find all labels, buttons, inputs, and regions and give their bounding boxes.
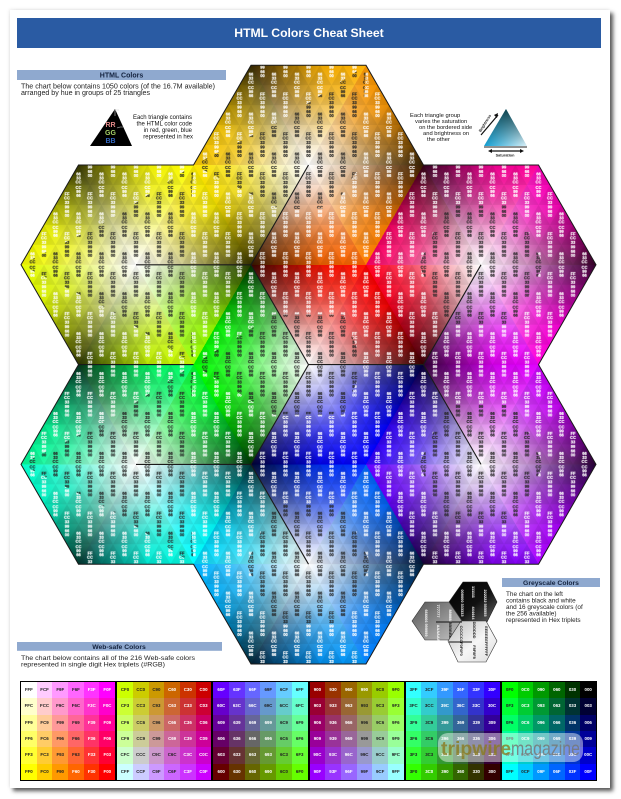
block: 6XX colors: 6F6 <box>296 736 303 741</box>
block: 9XX colors: 93C <box>329 752 337 757</box>
block: 6XX colors: 6F0 <box>296 769 303 774</box>
intro text: HTML Colors: arranged by hue in groups of 25 triangles <box>21 90 151 97</box>
text: greyscale description: represented in Hex triplets <box>506 617 581 624</box>
block: 0XX colors: 0C0 <box>521 687 529 692</box>
legend text: triangle group: and brightness on <box>423 131 469 137</box>
block: 9XX colors: 936 <box>329 720 337 725</box>
block: FXX colors: F6F <box>72 687 80 692</box>
block: 0XX colors: 0F3 <box>506 703 513 708</box>
block: 3XX colors: 33F <box>473 687 480 692</box>
block: FXX colors: F9C <box>56 703 64 708</box>
block: CXX colors: C06 <box>199 720 208 725</box>
block: 6XX colors: 66F <box>249 687 256 692</box>
block: 9XX colors: 906 <box>314 720 321 725</box>
block: FXX colors: F69 <box>72 720 80 725</box>
block: 9XX colors: 9C3 <box>376 703 384 708</box>
block: CXX colors: CF9 <box>121 736 129 741</box>
block: 6XX colors: 69C <box>264 703 272 708</box>
block: FXX colors: F03 <box>104 752 111 757</box>
block: CXX colors: C3F <box>184 769 192 774</box>
block: 3XX colors: 3F3 <box>410 752 417 757</box>
block: CXX colors: CC3 <box>136 703 145 708</box>
block: 6XX colors: 69F <box>264 687 272 692</box>
block: 6XX colors: 6C3 <box>280 752 288 757</box>
hexagon: black to dark grey <box>449 582 497 622</box>
hexagon: red to yellow hues <box>194 65 424 265</box>
block: 0XX colors: 09F <box>537 769 545 774</box>
legend text: triangle code: Each triangle contains <box>133 115 192 121</box>
hexagon chart outline and border lines <box>21 65 596 664</box>
block: 0XX colors: 00F <box>584 769 592 774</box>
block: 3XX colors: 369 <box>457 720 464 725</box>
chart: greyscale hexagons <box>412 582 497 662</box>
block: 0XX colors: 093 <box>537 703 545 708</box>
block: 9XX colors: 960 <box>345 687 352 692</box>
block: 9XX colors: 9F6 <box>392 720 400 725</box>
block: FXX colors: FFC <box>25 703 33 708</box>
block: 9XX colors: 99C <box>360 752 368 757</box>
hexagon: blue to magenta hues <box>366 365 596 564</box>
block: FXX colors: F36 <box>88 736 95 741</box>
block: 9XX colors: 93F <box>329 769 337 774</box>
hexagon: black to dark grey: 000000 <box>460 590 465 602</box>
block: CXX colors: C33 <box>184 703 192 708</box>
hexagon: light grey to white: DDDDDD <box>472 622 477 639</box>
block: 9XX colors: 9F9 <box>392 736 400 741</box>
block: 0XX colors: 066 <box>553 720 560 725</box>
text: greyscale description: and 16 greyscale colors (of <box>506 604 583 611</box>
legend text: triangle code <box>133 115 193 140</box>
block: FXX colors: FC3 <box>40 752 49 757</box>
block: 6XX colors: 636 <box>233 736 241 741</box>
block: 3XX colors: 3C0 <box>425 769 433 774</box>
block: 6XX colors: 60F <box>217 687 225 692</box>
block: 9XX colors: 996 <box>361 720 368 725</box>
hexagon: mid grey <box>412 602 462 642</box>
block: 6XX colors <box>212 681 309 781</box>
block: 6XX colors: 63C <box>233 703 241 708</box>
block: 6XX colors: 6F3 <box>296 752 303 757</box>
watermark: tripwire magazine <box>438 733 583 762</box>
block: 3XX colors: 3CC <box>425 703 434 708</box>
block: 3XX colors: 3C9 <box>425 720 433 725</box>
hexagon: magenta to red hues <box>366 165 596 365</box>
block: 9XX colors: 9F3 <box>392 703 400 708</box>
hexagon: light grey to white: F0F0F0 <box>459 642 464 656</box>
block: 9XX colors: 903 <box>314 703 321 708</box>
hexagon: black to dark grey: 111111 <box>471 586 476 599</box>
heading: Greyscale Colors: Greyscale Colors <box>523 580 579 587</box>
hexagon: mid grey: 777777 <box>436 605 441 617</box>
block: CXX colors: CFC <box>120 752 130 757</box>
block: 9XX colors: 96C <box>345 752 353 757</box>
block: FXX colors: F00 <box>104 769 111 774</box>
block: CXX colors: C69 <box>168 736 176 741</box>
block: 3XX colors: 3F9 <box>410 720 417 725</box>
block: 0XX colors: 06F <box>553 769 561 774</box>
text: web-safe description: represented in single digit Hex triplets (#RGB) <box>21 662 165 668</box>
block: 3XX colors: 366 <box>457 736 464 741</box>
block: FXX colors: FCC <box>40 703 49 708</box>
block: 0XX colors: 033 <box>569 703 576 708</box>
block: 0XX colors: 09C <box>537 752 545 757</box>
block: 6XX colors: 600 <box>218 769 225 774</box>
hexagon: light grey to white: F8F8F8 <box>472 645 477 660</box>
block: CXX colors: C0C <box>199 752 208 757</box>
block: FXX colors: F60 <box>72 769 80 774</box>
block: 0XX colors: 039 <box>569 736 576 741</box>
watermark: tripwire magazine: magazine <box>511 738 580 760</box>
hexagon: light grey to white: CCCCCC <box>459 626 464 643</box>
block: 6XX colors: 60C <box>217 703 225 708</box>
block: 9XX colors: 90F <box>314 769 321 774</box>
block: 9XX colors: 909 <box>314 736 321 741</box>
block: 3XX colors: 306 <box>488 736 496 741</box>
block: 9XX colors: 9CC <box>376 752 385 757</box>
block: 0XX colors: 006 <box>585 720 592 725</box>
block: 9XX colors: 900 <box>314 687 321 692</box>
block: FXX colors: F9F <box>56 687 64 692</box>
block: CXX colors: C36 <box>184 720 192 725</box>
heading: Greyscale Colors <box>502 578 600 587</box>
block: 0XX colors: 0C9 <box>521 736 529 741</box>
hexagon: light grey to white: FFFFFF <box>484 642 489 657</box>
block: FXX colors: F66 <box>72 736 80 741</box>
block: CXX colors: CF3 <box>121 703 129 708</box>
block: 9XX colors: 993 <box>361 703 368 708</box>
block: 6XX colors: 63F <box>233 687 241 692</box>
block: CXX colors: C90 <box>152 687 160 692</box>
header banner: HTML Colors Cheat Sheet <box>234 26 384 40</box>
block: 9XX colors: 9CF <box>376 769 384 774</box>
hexagon: cyan to blue hues <box>194 464 424 664</box>
block: FXX colors: F96 <box>56 736 64 741</box>
block: CXX colors: CF6 <box>121 720 129 725</box>
block: FXX colors: F99 <box>56 720 64 725</box>
block: 3XX colors: 339 <box>473 720 480 725</box>
block: 0XX colors: 0F9 <box>506 736 513 741</box>
block: FXX colors: F06 <box>104 736 111 741</box>
block: 9XX colors: 9F0 <box>392 687 400 692</box>
block: 0XX colors: 0CC <box>521 752 530 757</box>
block: 6XX colors: 6C6 <box>280 736 288 741</box>
block: FXX colors <box>20 681 116 781</box>
block: 3XX colors: 33C <box>472 703 480 708</box>
legend text: triangle group: the other <box>427 137 450 143</box>
block: 0XX colors: 036 <box>569 720 576 725</box>
block: FXX colors: F0C <box>103 703 111 708</box>
block: 3XX colors: 396 <box>441 736 449 741</box>
web-safe color chart <box>20 681 597 781</box>
block: 0XX colors: 0F0 <box>506 687 513 692</box>
intro text: HTML Colors: The chart below contains 1050 colors (of the 16.7M available) <box>21 83 215 90</box>
block: 6XX colors: 603 <box>218 752 225 757</box>
block: 9XX colors: 99F <box>361 769 368 774</box>
block: 3XX colors: 309 <box>488 720 496 725</box>
block: 9XX colors: 930 <box>329 687 337 692</box>
block: 6XX colors: 6CC <box>280 703 288 708</box>
block: CXX colors: CC0 <box>136 687 145 692</box>
block: 9XX colors <box>309 681 405 781</box>
block: CXX colors: CFF <box>121 769 129 774</box>
block: FXX colors: F63 <box>72 752 80 757</box>
block: 9XX colors: 90C <box>313 752 321 757</box>
block: CXX colors: CF0 <box>121 687 129 692</box>
block: 3XX colors <box>405 681 501 781</box>
block: CXX colors: C00 <box>199 687 208 692</box>
block: 0XX colors: 030 <box>569 687 576 692</box>
text: greyscale description <box>506 591 583 624</box>
block: 6XX colors: 663 <box>249 752 256 757</box>
block: FXX colors: FFF <box>25 687 33 692</box>
block: 0XX colors: 063 <box>553 703 560 708</box>
block: CXX colors: CCF <box>136 769 145 774</box>
block: CXX colors: C60 <box>168 687 176 692</box>
block: 3XX colors: 3CF <box>425 687 433 692</box>
block: 6XX colors: 633 <box>233 752 241 757</box>
text: web-safe description: The chart below contains all of the 216 Web-safe colors <box>21 655 196 662</box>
block: 6XX colors: 66C <box>249 703 257 708</box>
block: 0XX colors: 0CF <box>521 769 530 774</box>
block: 9XX colors: 963 <box>345 703 352 708</box>
block: 0XX colors: 0FC <box>506 752 514 757</box>
block: 9XX colors: 939 <box>329 736 337 741</box>
block: CXX colors: C6C <box>168 752 176 757</box>
legend text: triangle code: in red, green, blue <box>144 128 193 134</box>
block: CXX colors: C9F <box>152 769 161 774</box>
block: CXX colors: CCC <box>136 752 145 757</box>
block: 3XX colors: 30C <box>488 703 496 708</box>
block: 3XX colors: 363 <box>457 752 464 757</box>
block: FXX colors: FCF <box>40 687 49 692</box>
heading: Web-safe Colors: Web-safe Colors <box>92 644 146 651</box>
legend text: triangle group: varies the saturation <box>415 119 467 125</box>
block: 0XX colors: 099 <box>537 736 545 741</box>
block: FXX colors: FC9 <box>40 720 49 725</box>
intro text: HTML Colors <box>21 83 215 97</box>
block: 6XX colors: 6C0 <box>280 769 288 774</box>
block: 0XX colors: 0C3 <box>521 703 529 708</box>
block: 0XX colors: 069 <box>553 736 560 741</box>
block: 9XX colors: 999 <box>361 736 368 741</box>
block: FXX colors: F6C <box>72 703 80 708</box>
legend text: triangle group: on the bordered side <box>419 125 472 131</box>
hexagon: mid grey: 999999 <box>424 624 429 637</box>
block: 6XX colors: 6FC <box>296 703 304 708</box>
block: 0XX colors: 0FF <box>506 769 514 774</box>
hexagon: black to dark grey: 222222 <box>483 590 488 603</box>
block: 0XX colors: 003 <box>585 703 592 708</box>
block: 0XX colors <box>501 681 597 781</box>
legend text: triangle code: represented in hex <box>143 134 193 140</box>
block: FXX colors: F0F <box>103 687 111 692</box>
block: 9XX colors: 933 <box>329 703 337 708</box>
block: 6XX colors: 666 <box>249 736 256 741</box>
hexagon: mid grey: 888888 <box>448 610 453 623</box>
block: 9XX colors: 96F <box>345 769 353 774</box>
block: 6XX colors: 6C9 <box>280 720 288 725</box>
hexagon: central red green blue <box>194 265 424 464</box>
block: 3XX colors: 3F6 <box>410 736 417 741</box>
block: 3XX colors: 360 <box>457 769 464 774</box>
block: FXX colors: FF3 <box>25 752 33 757</box>
icon: triangle code legend: GG <box>105 130 116 137</box>
icon: triangle code legend: BB <box>105 138 116 145</box>
text: web-safe description <box>21 655 196 668</box>
text: greyscale description: contains black and white <box>506 598 576 604</box>
legend text: triangle code: the HTML color code <box>137 122 193 128</box>
watermark: tripwire magazine: tripwire <box>441 738 511 760</box>
block: 9XX colors: 9FF <box>392 769 400 774</box>
block: 3XX colors: 39C <box>441 703 449 708</box>
block: CXX colors: C30 <box>184 687 192 692</box>
block: 3XX colors: 3C6 <box>425 736 433 741</box>
block: 3XX colors: 333 <box>473 752 480 757</box>
hexagon: green to cyan hues <box>21 365 251 564</box>
block: 9XX colors: 966 <box>345 720 352 725</box>
icon: triangle code legend: RR <box>105 122 116 129</box>
block: 9XX colors: 9C6 <box>376 720 384 725</box>
block: 0XX colors: 0F6 <box>506 720 513 725</box>
block: 6XX colors: 606 <box>218 736 225 741</box>
block: 6XX colors: 660 <box>249 769 256 774</box>
hexagon: light grey to white: EEEEEE <box>484 626 489 642</box>
block: CXX colors: C66 <box>168 720 176 725</box>
block: 6XX colors: 699 <box>265 720 272 725</box>
block: FXX colors: F93 <box>56 752 64 757</box>
icon: saturation and brightness triangle: Brightness <box>478 114 492 133</box>
block: 3XX colors: 36C <box>457 703 465 708</box>
block: 3XX colors: 393 <box>441 752 449 757</box>
block: 9XX colors: 969 <box>345 736 352 741</box>
block: 3XX colors: 390 <box>441 769 449 774</box>
heading: HTML Colors <box>17 70 226 80</box>
block: FXX colors: FF9 <box>25 720 33 725</box>
block: 0XX colors: 009 <box>585 736 592 741</box>
block: 3XX colors: 36F <box>457 687 464 692</box>
block: 0XX colors: 096 <box>537 720 545 725</box>
hexagon: mid grey: 666666 <box>424 610 429 623</box>
block: 3XX colors: 300 <box>488 769 496 774</box>
block: 0XX colors: 0C6 <box>521 720 529 725</box>
block: 6XX colors: 639 <box>233 720 241 725</box>
block: FXX colors: F3C <box>87 703 96 708</box>
block: 0XX colors: 03C <box>568 752 577 757</box>
block: 9XX colors: 9C0 <box>376 687 384 692</box>
block: 3XX colors: 303 <box>488 752 496 757</box>
block: CXX colors: C09 <box>199 736 208 741</box>
text: greyscale description: the 256 available) <box>506 610 556 618</box>
icon: saturation and brightness triangle <box>478 109 527 158</box>
icon: triangle code legend <box>90 109 132 146</box>
block: FXX colors: F90 <box>56 769 64 774</box>
block: 3XX colors: 336 <box>473 736 480 741</box>
hexagon: light grey to white <box>448 621 497 662</box>
block: CXX colors: C39 <box>184 736 192 741</box>
legend text: triangle group <box>410 113 472 143</box>
block: 3XX colors: 39F <box>441 687 449 692</box>
block: CXX colors: C6F <box>168 769 176 774</box>
block: 6XX colors: 6CF <box>280 687 288 692</box>
block: 0XX colors: 03F <box>569 769 576 774</box>
block: 3XX colors: 3FC <box>409 703 418 708</box>
block: 0XX colors: 000 <box>585 687 592 692</box>
block: 6XX colors: 693 <box>265 752 272 757</box>
icon: saturation and brightness triangle: Saturation <box>496 154 515 158</box>
block: 3XX colors: 399 <box>441 720 449 725</box>
block: CXX colors: C9C <box>152 752 161 757</box>
block: FXX colors: FC0 <box>40 769 49 774</box>
hexagon: mid grey: AAAAAA <box>436 625 441 642</box>
hexagon: black to dark grey: 333333 <box>460 604 465 617</box>
block: FXX colors: FC6 <box>40 736 49 741</box>
block: FXX colors: FF6 <box>25 736 33 741</box>
block: 6XX colors: 669 <box>249 720 256 725</box>
block: 0XX colors: 06C <box>553 752 561 757</box>
block: FXX colors: F09 <box>104 720 111 725</box>
block: 6XX colors: 6F9 <box>296 720 303 725</box>
block: 3XX colors: 3C3 <box>425 752 433 757</box>
hexagon: yellow to green hues <box>21 165 251 365</box>
block: CXX colors: C03 <box>199 703 208 708</box>
block: FXX colors: F39 <box>88 720 95 725</box>
block: 0XX colors: 090 <box>537 687 545 692</box>
block: 6XX colors: 6FF <box>296 687 304 692</box>
block: CXX colors: C96 <box>152 720 160 725</box>
block: FXX colors: FF0 <box>25 769 33 774</box>
block: 3XX colors: 3F0 <box>410 769 417 774</box>
legend text: triangle group: Each triangle group <box>410 113 460 119</box>
heading: Web-safe Colors <box>17 642 222 651</box>
block: CXX colors: C63 <box>168 703 176 708</box>
block: CXX colors: C3C <box>183 752 192 757</box>
block: CXX colors: CC6 <box>136 720 145 725</box>
hexagon: mid grey: BBBBBB <box>448 622 453 639</box>
block: 6XX colors: 630 <box>233 769 241 774</box>
heading: HTML Colors: HTML Colors <box>100 72 143 80</box>
block: 6XX colors: 690 <box>265 769 272 774</box>
block: CXX colors: C93 <box>152 703 160 708</box>
block: 6XX colors: 696 <box>265 736 272 741</box>
block: 9XX colors: 9FC <box>392 752 400 757</box>
header banner <box>17 18 601 48</box>
block: 9XX colors: 990 <box>361 687 368 692</box>
hexagon: black to dark grey: 444444 <box>471 607 476 620</box>
block: 0XX colors: 00C <box>584 752 592 757</box>
block: 3XX colors: 30F <box>488 687 496 692</box>
block: CXX colors: C0F <box>199 769 208 774</box>
block: 3XX colors: 3FF <box>410 687 417 692</box>
text: greyscale description: The chart on the left <box>506 591 563 598</box>
hexagon: black to dark grey: 555555 <box>483 604 488 617</box>
block: CXX colors: C99 <box>152 736 160 741</box>
block: FXX colors: F3F <box>88 687 96 692</box>
block: 0XX colors: 060 <box>553 687 560 692</box>
block: CXX colors: CC9 <box>136 736 145 741</box>
block: 9XX colors: 9C9 <box>376 736 384 741</box>
block: FXX colors: F33 <box>88 752 95 757</box>
block: FXX colors: F30 <box>88 769 95 774</box>
block: 6XX colors: 609 <box>218 720 225 725</box>
block: 3XX colors: 330 <box>473 769 480 774</box>
block: CXX colors <box>116 681 212 781</box>
